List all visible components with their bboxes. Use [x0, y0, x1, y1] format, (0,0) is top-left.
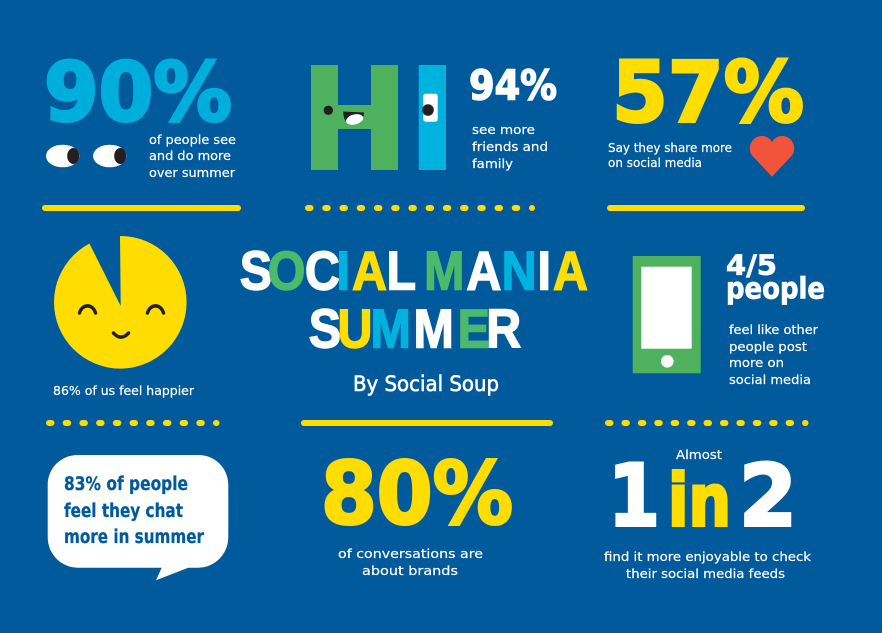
- divider: middle left dotted: [49, 420, 216, 426]
- panel: 86 percent: [53, 232, 195, 399]
- panel: 94 percent: [311, 61, 557, 172]
- caption: 4 of 5 people: feel like other: [729, 323, 819, 338]
- stat: 1 in 2: 1: [608, 446, 660, 546]
- caption: 90 percent: of people see: [149, 133, 236, 148]
- stat: 90%: 90%: [44, 46, 232, 140]
- panel: 57 percent: [608, 44, 804, 177]
- bubble text: [64, 474, 205, 548]
- caption: 1 in 2: [604, 550, 812, 582]
- title line: Social Mania: S: [240, 240, 272, 301]
- stat: 4/5 people: people: [726, 272, 825, 306]
- title line: Summer: E: [458, 298, 490, 359]
- stat: 1 in 2: [608, 446, 797, 546]
- title line: Social Mania: A: [352, 240, 387, 301]
- icon: HI face: [311, 65, 446, 170]
- panel: speech bubble: [48, 455, 228, 580]
- title line: Social Mania: A: [553, 240, 588, 301]
- icon: eyes: [46, 145, 126, 167]
- stat: 94%: 94%: [469, 61, 557, 109]
- caption: 94 percent: see more: [472, 123, 535, 138]
- caption: 1 in 2: find it more enjoyable to check: [604, 550, 812, 565]
- bubble text: 83% of people: [64, 474, 188, 495]
- caption: 90 percent: and do more: [149, 149, 231, 164]
- stat: 1 in 2: 2: [739, 446, 797, 546]
- divider: top left: [42, 205, 241, 211]
- divider: middle centre: [301, 420, 553, 426]
- icon: smiling pie face: [54, 232, 187, 369]
- caption: 94 percent: friends and: [472, 140, 548, 155]
- caption: 4 of 5 people: [729, 323, 819, 388]
- caption: 4 of 5 people: social media: [729, 373, 811, 388]
- title line: Summer: M: [414, 298, 454, 359]
- icon: phone: [633, 256, 701, 373]
- bubble text: more in summer: [64, 527, 205, 548]
- divider: top right: [607, 205, 805, 211]
- caption: 57 percent: on social media: [608, 156, 702, 171]
- bubble text: feel they chat: [64, 501, 183, 522]
- caption: 90 percent: [149, 133, 236, 181]
- panel: 80 percent: [321, 444, 513, 579]
- stat: 80%: 80%: [321, 444, 513, 544]
- caption: 1 in 2: their social media feeds: [626, 567, 785, 582]
- caption: 57 percent: [608, 141, 732, 171]
- stat: 1 in 2: in: [668, 458, 731, 542]
- title line: Summer: M: [370, 298, 411, 359]
- divider: top centre dotted: [308, 205, 532, 211]
- panel: 90 percent: [44, 46, 236, 181]
- byline: By Social Soup: [353, 372, 499, 396]
- caption: 80 percent: of conversations are: [338, 547, 483, 562]
- caption: 90 percent: over summer: [149, 166, 236, 181]
- caption: 4 of 5 people: more on: [729, 356, 784, 371]
- title line: Summer: R: [486, 298, 521, 359]
- title line: Social Mania: I: [337, 240, 350, 301]
- caption: 94 percent: [472, 123, 548, 172]
- caption: 57 percent: Say they share more: [608, 141, 732, 156]
- stat: 4/5 people: [726, 248, 825, 306]
- icon: speech bubble shape: [48, 455, 228, 580]
- title line: Summer: S: [309, 298, 341, 359]
- stat: 57%: 57%: [612, 44, 804, 142]
- title line: Summer: U: [337, 298, 372, 359]
- title line: Social Mania: N: [502, 240, 537, 301]
- caption: 80 percent: about brands: [362, 564, 458, 579]
- icon: heart: [750, 136, 794, 177]
- caption: 80 percent: [338, 547, 483, 579]
- panel: 1 in 2: [604, 446, 812, 582]
- title line: Social Mania: O: [268, 240, 305, 301]
- caption: 86 percent: 86% of us feel happier: [53, 384, 195, 399]
- title line: Social Mania: A: [466, 240, 501, 301]
- caption: 4 of 5 people: people post: [729, 340, 807, 355]
- title line: Social Mania: L: [386, 240, 416, 301]
- label: Almost: Almost: [676, 448, 722, 463]
- panel: 4 of 5 people: [633, 248, 825, 388]
- title line: Social Mania: M: [424, 240, 464, 301]
- stat: 4/5 people: 4/5: [726, 248, 777, 282]
- divider: middle right dotted: [608, 420, 806, 426]
- title: [240, 240, 588, 396]
- caption: 94 percent: family: [472, 157, 513, 172]
- title line: Social Mania: I: [538, 240, 551, 301]
- title line: Social Mania: C: [305, 240, 340, 301]
